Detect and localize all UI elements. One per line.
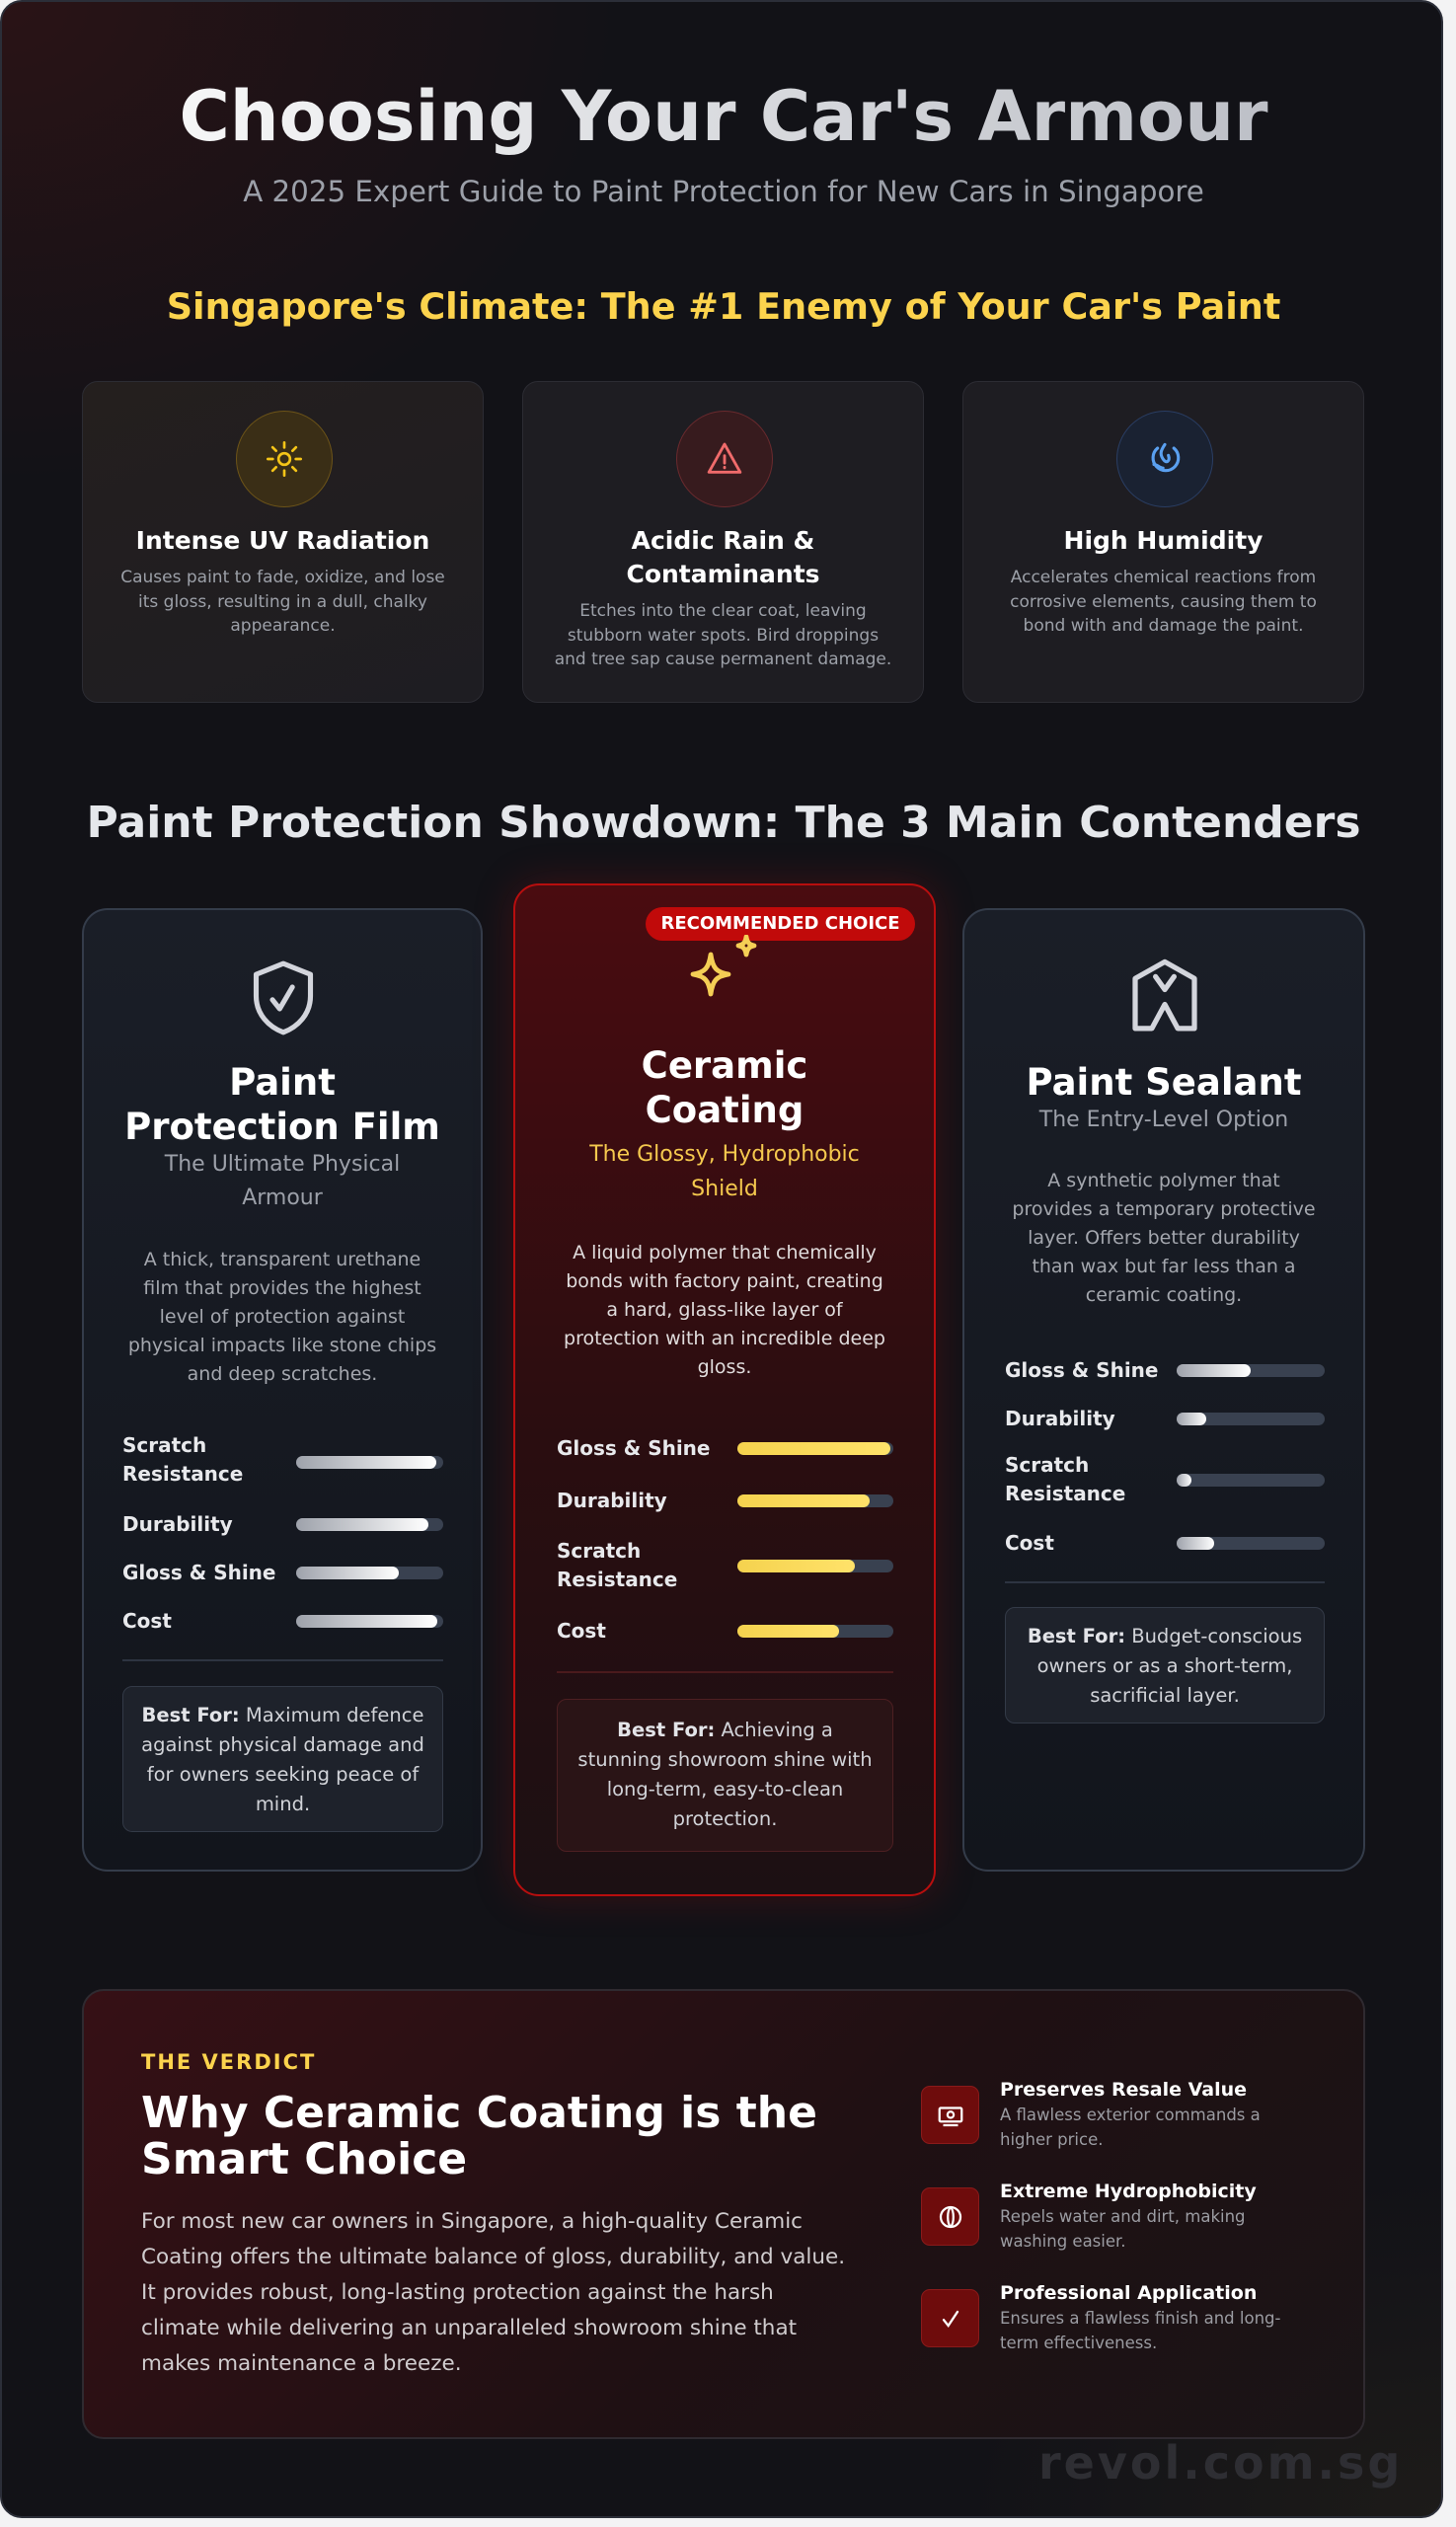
benefit: professional application: Ensures a flawless finish and long-term effectiveness.	[1000, 2309, 1280, 2352]
bar chart: ratings: Durability	[557, 1489, 667, 1512]
icon: shield	[253, 961, 314, 1034]
bar chart: ratings	[1005, 1358, 1325, 1555]
bar chart: ratings: Cost	[557, 1619, 606, 1643]
badge: recommended: RECOMMENDED CHOICE	[660, 913, 900, 934]
panel: acid rain	[522, 381, 924, 703]
list: benefits	[921, 2079, 1280, 2352]
benefit: resale value	[921, 2079, 1261, 2149]
heading	[124, 1061, 440, 1148]
callout: best for: Best For: Maximum defence against physical damage and for owners seeking peace of mind.	[141, 1704, 424, 1815]
panel: PPF	[82, 908, 483, 1872]
icon: humidity	[1116, 411, 1213, 507]
bar chart: ratings: Resistance	[122, 1462, 243, 1486]
panel: verdict	[82, 1989, 1365, 2439]
section heading: climate: Singapore's Climate: The #1 Enemy of Your Car's Paint	[167, 285, 1280, 328]
bar chart: ratings: Gloss & Shine	[1005, 1358, 1159, 1382]
bar chart: ratings: Scratch	[557, 1539, 641, 1563]
bar chart: ratings: Gloss & Shine	[557, 1436, 711, 1460]
callout: best for: Best For: Achieving a stunning showroom shine with long-term, easy-to-clean protection.	[577, 1719, 873, 1830]
bar chart: ratings: Cost	[122, 1609, 172, 1633]
benefit: hydrophobicity	[921, 2181, 1257, 2251]
bar chart: ratings	[122, 1433, 443, 1633]
description: A synthetic polymer that provides a temporary protective layer. Offers better durability than wax but far less than a ceramic coating.	[1012, 1170, 1316, 1306]
heading: Ceramic	[642, 1044, 807, 1087]
bar chart: ratings: Scratch	[1005, 1453, 1089, 1477]
title: Choosing Your Car's Armour	[179, 76, 1268, 157]
heading: Coating	[646, 1089, 804, 1131]
heading: Paint Sealant	[1026, 1061, 1302, 1104]
text block: For most new car owners in Singapore, a high-quality Ceramic Coating offers the ultimate balance of gloss, durability, and value. It provides robust, long-lasting protection against the harsh climate while delivering an unparalleled showroom shine that makes maintenance a breeze.	[141, 2209, 845, 2376]
title	[2, 71, 1445, 162]
subtitle: The Ultimate Physical Armour	[165, 1152, 400, 1210]
bar chart: ratings: Gloss & Shine	[122, 1561, 276, 1584]
benefit: resale value: Preserves Resale Value	[1000, 2079, 1247, 2101]
heading	[642, 1044, 807, 1131]
label: the verdict: THE VERDICT	[141, 2050, 316, 2074]
icon: sun	[236, 411, 333, 507]
benefit: hydrophobicity: Repels water and dirt, making washing easier.	[1000, 2207, 1246, 2251]
benefit: resale value: A flawless exterior commands a higher price.	[1000, 2106, 1261, 2149]
benefit: hydrophobicity: Extreme Hydrophobicity	[1000, 2181, 1257, 2202]
heading: Paint	[229, 1061, 336, 1104]
panel: paint sealant	[962, 908, 1365, 1872]
heading: Acidic Rain &	[632, 526, 814, 555]
badge: recommended	[646, 907, 915, 941]
bar chart: ratings: Cost	[1005, 1531, 1054, 1555]
panel: humidity	[962, 381, 1364, 703]
bar chart: ratings	[557, 1436, 893, 1643]
callout: best for	[1005, 1607, 1325, 1723]
callout: best for: Best For: Budget-conscious owners or as a short-term, sacrificial layer.	[1028, 1625, 1302, 1707]
bar chart: ratings: Resistance	[557, 1568, 677, 1591]
panel: UV radiation	[82, 381, 484, 703]
heading: Protection Film	[124, 1106, 440, 1148]
heading: Intense UV Radiation	[136, 526, 429, 555]
callout: best for	[122, 1686, 443, 1832]
bar chart: ratings: Resistance	[1005, 1482, 1125, 1505]
description: Causes paint to fade, oxidize, and lose its gloss, resulting in a dull, chalky appearance.	[120, 568, 445, 636]
heading	[626, 526, 820, 588]
icon: sparkles	[691, 935, 756, 997]
icon: car front	[1132, 959, 1197, 1031]
description: A liquid polymer that chemically bonds with factory paint, creating a hard, glass-like layer of protection with an incredible deep gloss.	[564, 1242, 885, 1378]
benefit: professional application: Professional Application	[1000, 2282, 1257, 2304]
description: Accelerates chemical reactions from corrosive elements, causing them to bond with and damage the paint.	[1010, 568, 1317, 636]
bar chart: ratings: Durability	[122, 1512, 233, 1536]
bar chart: ratings: Scratch	[122, 1433, 206, 1457]
icon: warning	[676, 411, 773, 507]
heading: Contaminants	[626, 560, 820, 588]
watermark: revol.com.sg	[1038, 2436, 1403, 2489]
bar chart: ratings: Durability	[1005, 1407, 1115, 1430]
section heading: showdown: Paint Protection Showdown: The 3 Main Contenders	[86, 798, 1361, 848]
description: Etches into the clear coat, leaving stubborn water spots. Bird droppings and tree sap cause permanent damage.	[555, 601, 891, 669]
callout: best for	[557, 1699, 893, 1852]
subtitle: The Glossy, Hydrophobic Shield	[589, 1142, 860, 1201]
subtitle: The Entry-Level Option	[1039, 1108, 1288, 1132]
heading: Why Ceramic Coating is the Smart Choice	[141, 2088, 817, 2184]
subtitle: A 2025 Expert Guide to Paint Protection for New Cars in Singapore	[243, 175, 1204, 208]
panel: ceramic coating (recommended)	[513, 883, 936, 1896]
heading: High Humidity	[1064, 526, 1263, 555]
description: A thick, transparent urethane film that provides the highest level of protection against physical impacts like stone chips and deep scratches.	[128, 1249, 436, 1385]
benefit: professional application	[921, 2282, 1280, 2352]
